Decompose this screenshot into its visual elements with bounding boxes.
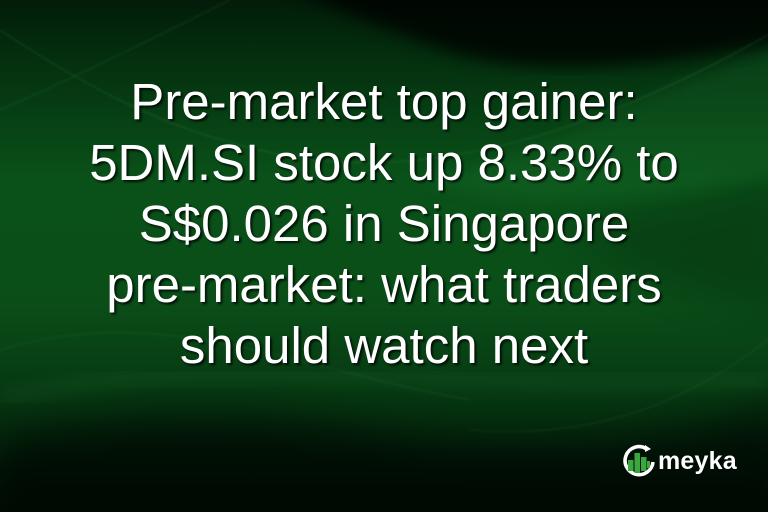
icon: circle with bars [625,445,653,475]
wordmark: meyka [658,447,738,475]
title: pre-market: what traders [106,256,662,313]
title [89,73,680,374]
logo: meyka [623,444,738,476]
title: Pre-market top gainer: [130,73,638,130]
title: S$0.026 in Singapore [139,195,629,252]
title: should watch next [180,317,588,374]
title: 5DM.SI stock up 8.33% to [89,134,679,191]
